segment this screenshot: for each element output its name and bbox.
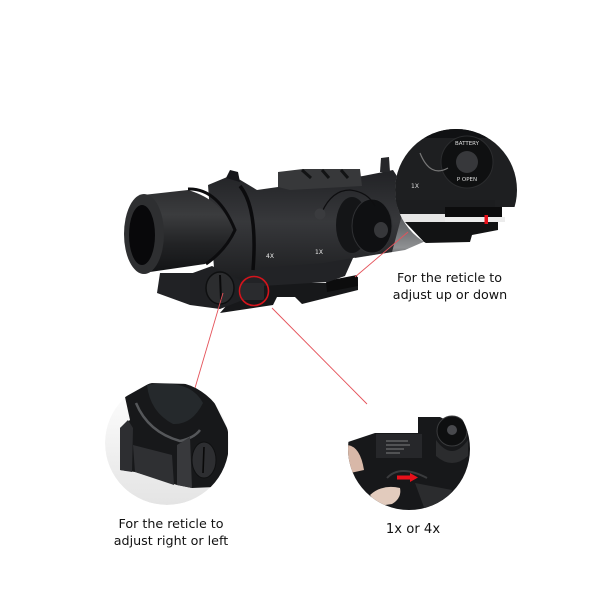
knob housing xyxy=(190,266,243,309)
scope rear tube xyxy=(355,190,428,258)
dial knurl xyxy=(436,440,468,463)
rear sight post xyxy=(380,157,390,172)
red circle around lever xyxy=(240,276,268,306)
caption: right or left line 2: adjust right or left xyxy=(114,533,228,548)
main scope photo: 1X xyxy=(315,249,323,256)
callout line: 1x or 4x xyxy=(272,308,367,404)
objective lens xyxy=(129,205,155,265)
base plate xyxy=(405,222,498,243)
white gap xyxy=(395,214,445,222)
red marker xyxy=(484,215,488,224)
left post xyxy=(120,420,133,472)
front block xyxy=(133,445,174,485)
caption: 1x or 4x: 1x or 4x xyxy=(386,522,440,537)
dial face xyxy=(352,199,392,253)
elevation gear xyxy=(326,275,358,292)
collar band xyxy=(188,189,235,264)
callout line: right or left xyxy=(195,293,223,388)
main scope photo xyxy=(124,157,428,313)
1X label: 1X xyxy=(411,183,419,190)
hood and housing xyxy=(120,383,228,488)
lower plate xyxy=(415,483,452,510)
knob xyxy=(192,442,216,478)
detail circle: elevation knob: BATTERY xyxy=(455,141,480,147)
gear xyxy=(445,207,502,217)
lower stage xyxy=(230,258,353,292)
detail circle: windage knob xyxy=(105,381,229,505)
lens xyxy=(147,383,203,424)
dial knurl xyxy=(336,197,368,253)
windage knob xyxy=(206,272,234,304)
scope body xyxy=(348,417,470,510)
caption: right or left: For the reticle to xyxy=(118,516,224,531)
vertical strap xyxy=(240,186,254,270)
fingers xyxy=(348,445,364,472)
caption: up or down line 2: adjust up or down xyxy=(393,287,507,302)
objective tube xyxy=(143,190,234,273)
red direction arrow xyxy=(397,473,418,482)
objective tube rim xyxy=(124,194,164,274)
spec plate xyxy=(376,434,422,458)
right post xyxy=(177,437,192,488)
main body xyxy=(208,170,406,285)
labels on body: 4X xyxy=(266,253,274,260)
left mount block xyxy=(157,273,193,305)
callout line: up or down xyxy=(355,232,408,277)
dial centre xyxy=(374,222,388,238)
detail circle: elevation knob: P OPEN xyxy=(457,177,477,183)
dial xyxy=(437,416,467,446)
front sight post xyxy=(226,170,240,182)
mount base plate xyxy=(220,277,358,313)
switch lever xyxy=(241,283,264,300)
caption: up or down: For the reticle to xyxy=(397,270,502,285)
detail circle: magnification lever xyxy=(348,416,470,510)
dial tether xyxy=(322,190,375,212)
top picatinny rail xyxy=(278,169,362,190)
lens rim xyxy=(136,403,200,441)
battery cap xyxy=(441,136,493,188)
lever ring xyxy=(387,471,427,478)
tether xyxy=(420,153,448,171)
dark body xyxy=(395,128,517,207)
detail circle: elevation knob xyxy=(395,128,517,251)
